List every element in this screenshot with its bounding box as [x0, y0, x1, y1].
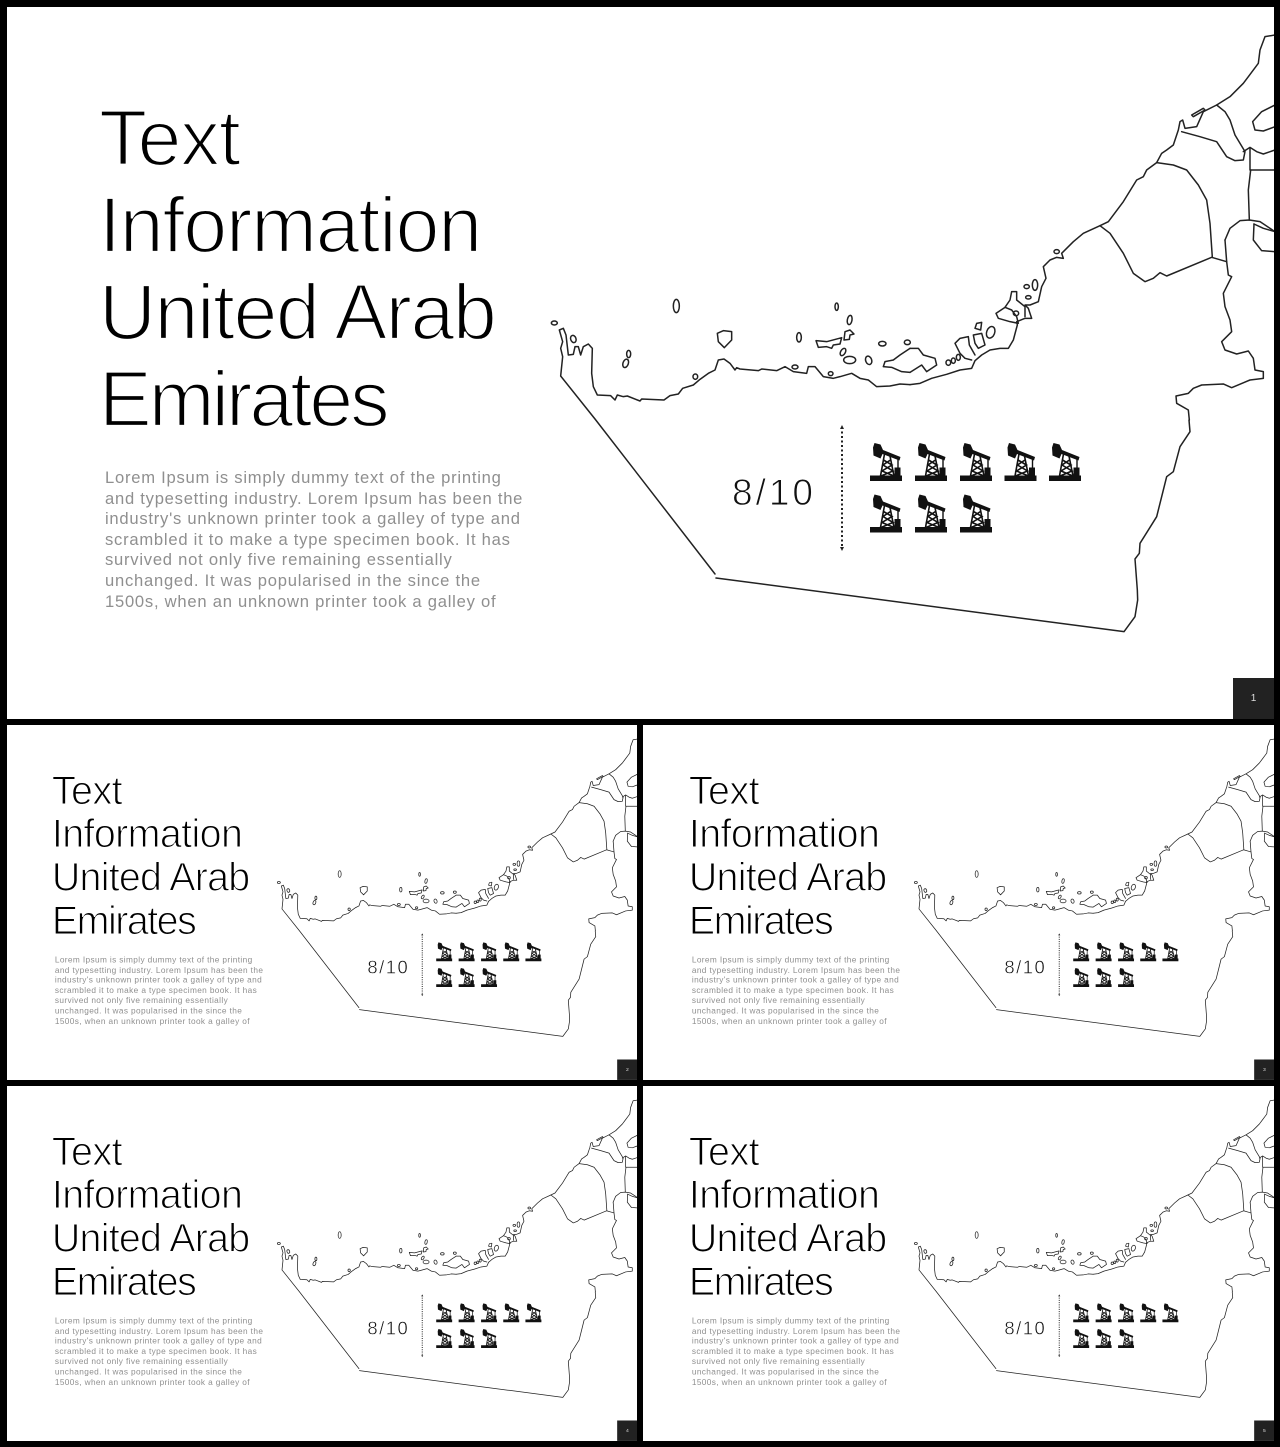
- text block: description: 1500s, when an unknown printer took a galley of: [105, 592, 496, 611]
- text block: description: unchanged. It was popularised in the since the: [692, 1006, 879, 1016]
- title: United Arab: [52, 1215, 249, 1260]
- title: Text: [52, 768, 122, 812]
- text block: description: and typesetting industry. Lorem Ipsum has been the: [55, 965, 263, 975]
- text block: description: 1500s, when an unknown printer took a galley of: [55, 1377, 250, 1387]
- text block: description: unchanged. It was popularised in the since the: [55, 1367, 242, 1377]
- text block: description: scrambled it to make a type specimen book. It has: [692, 1347, 894, 1356]
- title: [52, 768, 249, 942]
- panel: slide 4: [7, 1086, 637, 1441]
- text block: description: 1500s, when an unknown printer took a galley of: [55, 1016, 250, 1026]
- page number: 5: [1263, 1428, 1266, 1433]
- title: Text: [52, 1129, 122, 1173]
- map with oil pump chart: [277, 1100, 637, 1398]
- text block: description: and typesetting industry. Lorem Ipsum has been the: [55, 1326, 263, 1336]
- title: United Arab: [689, 854, 886, 899]
- stat: 8/10: 8/10: [732, 472, 816, 513]
- text block: description: unchanged. It was popularised in the since the: [692, 1367, 879, 1377]
- stat: 8/10: 8/10: [1004, 1318, 1046, 1338]
- text block: description: 1500s, when an unknown printer took a galley of: [692, 1377, 887, 1387]
- title: Emirates: [52, 1259, 195, 1303]
- page number: 1: [1251, 693, 1256, 704]
- map with oil pump chart: [914, 1100, 1274, 1398]
- map with oil pump chart: [914, 738, 1274, 1037]
- page number: [617, 1059, 638, 1080]
- stat: 8/10: 8/10: [367, 957, 409, 977]
- title: [52, 1129, 249, 1303]
- title: Information: [689, 1172, 879, 1216]
- title: United Arab: [99, 266, 495, 356]
- text block: description: and typesetting industry. Lorem Ipsum has been the: [692, 965, 900, 975]
- title: Information: [52, 1172, 242, 1216]
- text block: description: unchanged. It was popularised in the since the: [105, 571, 481, 590]
- text block: description: scrambled it to make a type specimen book. It has: [105, 530, 511, 549]
- title: [99, 92, 495, 442]
- text block: description: [105, 468, 523, 611]
- page number: 4: [626, 1428, 629, 1433]
- title: [689, 1129, 886, 1303]
- panel: slide 2: [7, 725, 637, 1080]
- title: United Arab: [52, 854, 249, 899]
- page number: 3: [1263, 1067, 1266, 1072]
- text block: description: industry's unknown printer took a galley of type and: [692, 1336, 899, 1346]
- title: [689, 768, 886, 942]
- text block: description: [692, 1316, 900, 1387]
- title: Information: [99, 180, 481, 268]
- text block: description: [55, 1316, 263, 1387]
- text block: description: industry's unknown printer took a galley of type and: [55, 975, 262, 985]
- title: Information: [52, 811, 242, 855]
- text block: description: Lorem Ipsum is simply dummy text of the printing: [692, 955, 890, 964]
- title: Emirates: [99, 354, 387, 442]
- text block: description: [692, 955, 900, 1026]
- title: Emirates: [52, 898, 195, 942]
- text block: description: [55, 955, 263, 1026]
- page number: [1254, 1420, 1275, 1441]
- title: Emirates: [689, 1259, 832, 1303]
- text block: description: and typesetting industry. Lorem Ipsum has been the: [692, 1326, 900, 1336]
- title: Text: [689, 1129, 759, 1173]
- panel: slide 5: [643, 1086, 1274, 1441]
- stat: 8/10: 8/10: [367, 1318, 409, 1338]
- page number: 2: [626, 1067, 629, 1072]
- title: Information: [689, 811, 879, 855]
- text block: description: survived not only five remaining essentially: [692, 1357, 865, 1366]
- text block: description: survived not only five remaining essentially: [55, 1357, 228, 1366]
- text block: description: survived not only five remaining essentially: [105, 550, 453, 569]
- text block: description: survived not only five remaining essentially: [55, 996, 228, 1005]
- page number: [1233, 678, 1274, 719]
- page number: [617, 1420, 638, 1441]
- text block: description: industry's unknown printer took a galley of type and: [55, 1336, 262, 1346]
- text block: description: Lorem Ipsum is simply dummy text of the printing: [55, 1316, 253, 1325]
- title: Emirates: [689, 898, 832, 942]
- text block: description: survived not only five remaining essentially: [692, 996, 865, 1005]
- map with oil pump chart: [550, 34, 1274, 632]
- map with oil pump chart: [277, 738, 637, 1037]
- icon row: oil pumps with dotted divider: [840, 425, 1081, 551]
- text block: description: Lorem Ipsum is simply dummy text of the printing: [105, 468, 502, 487]
- panel: main slide 1: [7, 7, 1274, 719]
- text block: description: Lorem Ipsum is simply dummy text of the printing: [692, 1316, 890, 1325]
- text block: description: and typesetting industry. Lorem Ipsum has been the: [105, 489, 523, 508]
- text block: description: industry's unknown printer took a galley of type and: [105, 509, 521, 528]
- text block: description: scrambled it to make a type specimen book. It has: [55, 986, 257, 995]
- text block: description: Lorem Ipsum is simply dummy text of the printing: [55, 955, 253, 964]
- text block: description: unchanged. It was popularised in the since the: [55, 1006, 242, 1016]
- title: Text: [689, 768, 759, 812]
- text block: description: scrambled it to make a type specimen book. It has: [55, 1347, 257, 1356]
- text block: description: 1500s, when an unknown printer took a galley of: [692, 1016, 887, 1026]
- text block: description: scrambled it to make a type specimen book. It has: [692, 986, 894, 995]
- title: United Arab: [689, 1215, 886, 1260]
- stat: 8/10: 8/10: [1004, 957, 1046, 977]
- page number: [1254, 1059, 1275, 1080]
- map: UAE outline: [551, 35, 1275, 632]
- panel: slide 3: [643, 725, 1274, 1080]
- text block: description: industry's unknown printer took a galley of type and: [692, 975, 899, 985]
- title: Text: [99, 92, 240, 182]
